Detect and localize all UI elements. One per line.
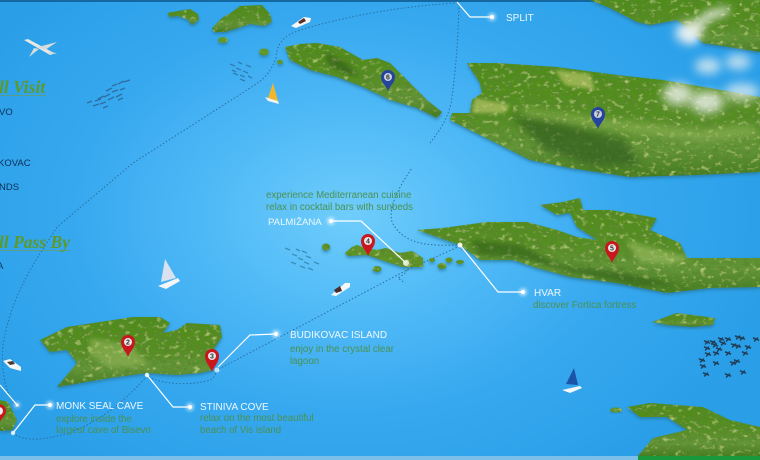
pin 3 xyxy=(205,349,219,372)
label: Palmizana: experience Mediterranean cuisine xyxy=(266,190,411,201)
label: Budikovac: lagoon xyxy=(290,356,319,367)
heading: will pass by: ll Pass By xyxy=(0,232,70,252)
boat: white central xyxy=(331,283,350,296)
label: Palmizana: PALMIŽANA xyxy=(268,217,322,228)
label: Budikovac: BUDIKOVAC ISLAND xyxy=(290,330,387,341)
island: pin 7 large island xyxy=(450,63,760,177)
label: Stiniva: relax on the most beautiful xyxy=(200,413,314,424)
label: Palmizana xyxy=(266,190,413,228)
ridge shading xyxy=(325,52,360,76)
island: bottom right xyxy=(610,403,760,457)
pin 4: 4 xyxy=(366,238,370,246)
route dotted lines xyxy=(2,3,460,439)
bottom bar xyxy=(0,456,760,460)
callout lines xyxy=(0,2,523,433)
visit list xyxy=(0,107,31,193)
pin 5 xyxy=(605,241,619,263)
island: top right xyxy=(590,0,760,52)
island: pin 6 long island xyxy=(285,43,442,118)
field patches xyxy=(472,70,595,113)
turtles school xyxy=(700,336,758,377)
fish school: west xyxy=(87,80,130,108)
fish school: north xyxy=(230,62,252,81)
islet west of it xyxy=(610,408,622,412)
pin 1 xyxy=(0,404,6,424)
label: Stiniva: beach of Vis island xyxy=(200,425,281,436)
mountain shading xyxy=(510,115,640,165)
boat: white motor north xyxy=(291,17,311,28)
islets near route xyxy=(218,37,283,64)
island: north-west small xyxy=(167,9,199,25)
label: Monk Seal Cave: explore inside the xyxy=(56,414,132,425)
label: Stiniva: STINIVA COVE xyxy=(200,402,269,413)
label: Budikovac: enjoy in the crystal clear xyxy=(290,344,395,355)
sailboat: yellow xyxy=(265,83,279,104)
boat: white left xyxy=(3,359,21,371)
island: north-west large xyxy=(212,5,272,32)
pin 6 xyxy=(381,70,395,91)
Hvar south shading xyxy=(470,240,680,286)
pin 5: 5 xyxy=(610,246,614,252)
island: small east xyxy=(652,313,715,327)
pin 2 xyxy=(121,335,135,357)
heading: will visit: ll Visit xyxy=(0,77,46,97)
label: Monk Seal Cave: MONK SEAL CAVE xyxy=(56,401,144,412)
pin 3: 3 xyxy=(210,354,214,360)
island: Palmizana group xyxy=(322,244,464,272)
label: Split: SPLIT xyxy=(506,13,534,24)
label: Budikovac xyxy=(290,330,395,367)
sailboat: blue xyxy=(562,368,582,393)
callout dots xyxy=(11,13,527,435)
top edge bar xyxy=(0,0,760,2)
label: Monk Seal Cave: largest cave of Bisevo xyxy=(56,425,151,436)
fish school: central xyxy=(285,248,319,270)
pin 7: 7 xyxy=(596,112,600,118)
pin 4 xyxy=(361,234,375,256)
pin 7 xyxy=(591,107,605,129)
label: Monk Seal Cave xyxy=(56,401,151,436)
pin 2: 2 xyxy=(126,340,130,346)
label: Palmizana: relax in cocktail bars with sunbeds xyxy=(266,202,413,213)
label: Hvar: HVAR xyxy=(534,288,561,299)
label: Hvar xyxy=(533,288,637,311)
clouds xyxy=(663,6,760,113)
light ridge xyxy=(520,108,760,142)
plane xyxy=(24,39,57,57)
Vis mountain shade xyxy=(90,338,150,368)
label: Stiniva xyxy=(200,402,314,436)
label: Hvar: discover Fortica fortress xyxy=(533,300,637,311)
Hvar light slope xyxy=(625,240,690,265)
island: Vis xyxy=(40,317,222,387)
sailboat: white xyxy=(158,259,180,289)
island: Bisevo xyxy=(0,400,17,431)
island: Hvar xyxy=(417,198,760,293)
pin 6: 6 xyxy=(386,74,390,82)
